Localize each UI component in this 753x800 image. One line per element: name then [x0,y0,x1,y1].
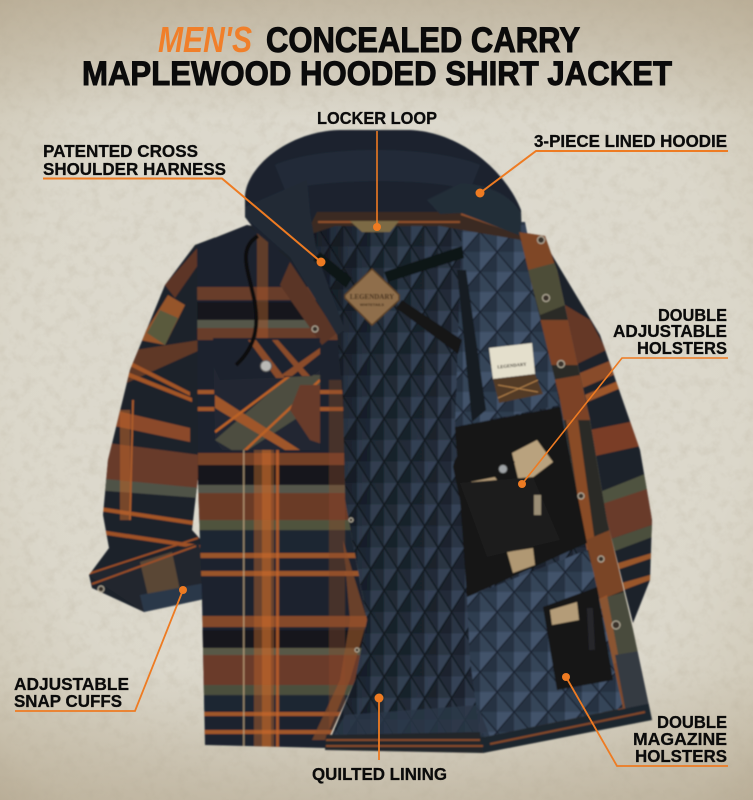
holster backing panel [455,407,587,597]
callout: double adjustable holsters: HOLSTERS [637,338,727,358]
lining hem puff [332,705,490,738]
callout: double magazine holsters: DOUBLE [657,712,727,732]
tan gun parts [468,440,553,573]
callout: double magazine holsters: HOLSTERS [635,746,727,766]
vertical lining strip [457,270,486,422]
lining shade [310,222,460,740]
title line 1: CONCEALED CARRY [266,21,580,60]
jacket illustration [85,130,660,760]
chest pocket [213,374,322,452]
left sleeve plaid [85,220,215,620]
neck band [305,212,521,240]
callout: adjustable snap cuffs: SNAP CUFFS [14,691,122,711]
harness strap upper [384,246,464,282]
hang tag: LEGENDARY [497,361,527,370]
callout: double magazine holsters: MAGAZINE [633,729,727,749]
hood seam shading [275,150,480,190]
callout: quilted lining [312,694,447,784]
title line 2: MAPLEWOOD HOODED SHIRT JACKET [82,55,672,93]
callout: 3-piece lined hoodie [476,131,728,198]
pocket flap [213,338,320,380]
hood left flap [245,180,345,335]
hood right flap [427,183,521,236]
leather patch: WHITETAILS [360,302,384,307]
callout: locker loop [317,108,437,231]
callout: adjustable snap cuffs: ADJUSTABLE [14,674,129,694]
callout: quilted lining: QUILTED LINING [312,764,447,784]
magazine holster [543,587,613,690]
hem plaid [325,732,483,753]
holster [453,443,560,557]
right placket plaid [481,231,653,754]
callout: patented cross shoulder harness: SHOULDER HARNESS [43,159,226,179]
callout: 3-piece lined hoodie: 3-PIECE LINED HOODIE [534,131,727,151]
callout: double adjustable holsters: ADJUSTABLE [613,321,727,341]
title [82,19,672,93]
hood back [245,130,522,250]
pocket flap plaid [248,340,320,378]
base silhouette [197,225,345,480]
callout: patented cross shoulder harness: PATENTED CROSS [43,141,198,161]
callout: double adjustable holsters [518,305,728,488]
callout: locker loop: LOCKER LOOP [317,108,437,128]
harness strap right [396,300,462,354]
callout: double adjustable holsters: DOUBLE [658,305,727,325]
lower right pocket lining [467,550,623,738]
callout: patented cross shoulder harness [43,141,326,266]
jacket snaps [98,236,620,652]
title accent: Men's: MEN'S [158,19,252,60]
hem stripes [326,740,483,746]
hood drawstring [236,236,258,365]
jacket lining [300,222,623,745]
leather patch: LEGENDARY [350,293,394,301]
callout: adjustable snap cuffs [14,586,187,711]
right lining panel [455,226,560,427]
hang tag [489,343,543,403]
left front plaid panel [196,225,368,749]
right sleeve plaid [550,254,653,624]
locker loop [350,221,399,232]
leather patch [345,269,399,325]
harness strap [313,252,352,288]
neck band stripes [318,214,521,234]
callout: double magazine holsters [562,673,728,766]
pocket snap [260,360,272,372]
